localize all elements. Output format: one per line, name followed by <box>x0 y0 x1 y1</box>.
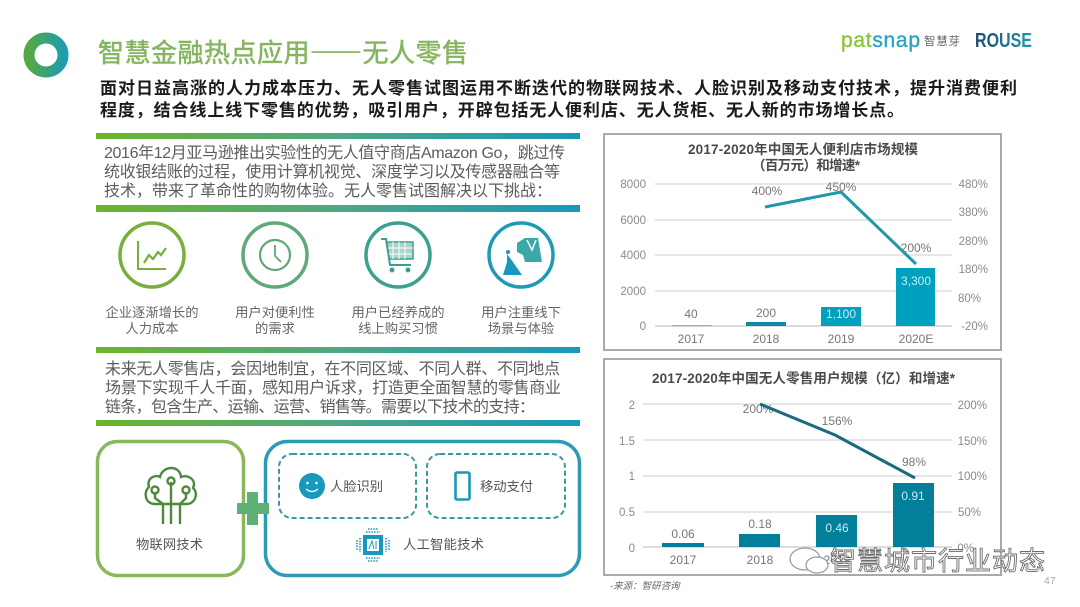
bar values: 0.18 <box>748 517 772 531</box>
logo: patsnap: 智慧芽 <box>924 34 960 48</box>
bar values <box>671 489 925 541</box>
growth labels: 400% <box>752 184 783 198</box>
panel: face recognition <box>279 454 416 518</box>
left axis: 6000 <box>620 215 646 227</box>
growth labels: 450% <box>826 180 857 194</box>
panel: mobile payment <box>427 454 565 518</box>
left axis <box>619 400 635 555</box>
left axis: 2000 <box>620 286 646 298</box>
label: AI: 人工智能技术 <box>403 537 484 552</box>
right axis: 380% <box>959 207 988 219</box>
growth line <box>765 192 916 264</box>
categories: 2017 <box>678 332 705 346</box>
right axis: 280% <box>959 236 988 248</box>
icon: AI chip <box>357 529 389 561</box>
grid lines and bars <box>655 184 952 326</box>
right axis: 80% <box>958 293 981 305</box>
label: challenge 1: 企业逐渐增长的 <box>105 304 199 320</box>
bar values: 0.91 <box>901 489 925 503</box>
panel: face recognition: 人脸识别 <box>330 479 383 494</box>
label: IoT: 物联网技术 <box>136 537 203 552</box>
left axis: 1 <box>629 471 635 483</box>
left axis: 0 <box>640 321 646 333</box>
chart title <box>688 141 918 173</box>
bar values: 0.06 <box>671 527 695 541</box>
growth labels: 200% <box>743 402 774 416</box>
chart title: 2017-2020年中国无人便利店市场规模 <box>688 141 918 157</box>
panel: future paragraph <box>96 347 580 426</box>
icon: title ring <box>29 38 63 72</box>
subtitle text block: 程度，结合线上线下零售的优势，吸引用户，开辟包括无人便利店、无人货柜、无人新的市场增长点。 <box>100 100 904 120</box>
growth labels: 156% <box>822 414 853 428</box>
logo: ROUSE: ROUSE <box>975 30 1032 52</box>
growth labels: 98% <box>902 455 926 469</box>
label: challenge 3 <box>351 304 445 336</box>
label: challenge 3: 用户已经养成的 <box>351 304 445 320</box>
categories: 2018 <box>753 332 780 346</box>
left axis: 8000 <box>620 179 646 191</box>
right axis: 0% <box>957 543 974 555</box>
panel: intro paragraph: 统收银结账的过程，使用计算机视觉、深度学习以及传感器融合等 <box>104 162 560 181</box>
categories: 2019 <box>824 553 851 567</box>
icon: rising labor cost chart <box>120 223 184 287</box>
label: challenge 2: 的需求 <box>255 321 295 336</box>
label: challenge 4: 用户注重线下 <box>481 304 561 320</box>
subtitle text block: 面对日益高涨的人力成本压力、无人零售试图运用不断迭代的物联网技术、人脸识别及移动支付技术，提升消费便利 <box>100 78 1017 98</box>
right axis <box>957 400 987 555</box>
left axis: 0.5 <box>619 507 635 519</box>
bar values: 40 <box>684 307 698 321</box>
page number: 47 <box>1044 575 1056 587</box>
logo: patsnap <box>841 29 960 52</box>
panel: chart 1 convenience store market <box>604 134 1001 350</box>
subtitle text block <box>100 78 1017 120</box>
icon: wechat bubbles <box>790 548 828 573</box>
panel: intro paragraph: 2016年12月亚马逊推出实验性的无人值守商店Amazon Go，跳过传 <box>104 144 565 162</box>
icon: clock <box>243 223 307 287</box>
left axis: 2 <box>629 400 635 412</box>
panel: intro paragraph <box>96 133 580 212</box>
growth line <box>760 404 915 478</box>
chart title: 2017-2020年中国无人零售用户规模（亿）和增速* <box>652 370 956 386</box>
right axis: 200% <box>958 400 987 412</box>
source note: -来源：智研咨询 <box>610 580 681 592</box>
growth labels <box>743 402 926 469</box>
label: challenge 1 <box>105 304 199 336</box>
label: challenge 1: 人力成本 <box>125 321 179 336</box>
categories: 2020E <box>899 332 933 346</box>
panel: AI technologies <box>266 442 580 576</box>
bar values: 1,100 <box>826 307 856 321</box>
panel: mobile payment: 移动支付 <box>480 479 533 494</box>
categories: 2018 <box>747 553 774 567</box>
watermark: 智慧城市行业动态 <box>830 546 1045 576</box>
bar values: 0.46 <box>825 521 849 535</box>
bar values <box>684 274 931 321</box>
right axis: 480% <box>959 179 988 191</box>
label: challenge 2: 用户对便利性 <box>235 304 315 320</box>
right axis: -20% <box>961 321 988 333</box>
panel: future paragraph: 场景下实现千人千面，感知用户诉求，打造更全面智慧的零售商业 <box>105 379 561 397</box>
icon: clothing <box>489 223 553 287</box>
label: challenge 4: 场景与体验 <box>488 321 554 336</box>
bar values: 200 <box>756 306 776 320</box>
icon: plus <box>237 492 269 525</box>
label: challenge 4 <box>481 304 561 336</box>
title: 智慧金融热点应用——无人零售 <box>98 33 468 70</box>
left axis: 4000 <box>620 250 646 262</box>
panel: future paragraph: 未来无人零售店，会因地制宜，在不同区域、不同人群、不同地点 <box>105 360 560 378</box>
panel: IoT technology <box>98 442 244 576</box>
right axis: 150% <box>958 436 987 448</box>
categories <box>670 553 851 567</box>
label: challenge 2 <box>235 304 315 336</box>
left axis <box>620 179 646 333</box>
left axis: 0 <box>629 543 635 555</box>
icon: shopping cart <box>366 223 430 287</box>
chart title: （百万元）和增速* <box>752 157 861 173</box>
right axis: 50% <box>958 507 981 519</box>
right axis: 100% <box>958 471 987 483</box>
panel: future paragraph: 链条，包含生产、运输、运营、销售等。需要以下技术的支持： <box>105 398 535 416</box>
categories <box>678 332 933 346</box>
bar values: 3,300 <box>901 274 931 288</box>
left axis: 1.5 <box>619 436 635 448</box>
label: challenge 3: 线上购买习惯 <box>358 320 438 336</box>
panel: intro paragraph: 技术，带来了革命性的购物体验。无人零售试图解决以下挑战： <box>104 182 552 200</box>
right axis: 180% <box>959 264 988 276</box>
growth labels <box>752 180 932 255</box>
categories: 2017 <box>670 553 697 567</box>
icon: circuit tree <box>146 468 196 524</box>
categories: 2019 <box>828 332 855 346</box>
growth labels: 200% <box>901 241 932 255</box>
grid lines and bars <box>643 404 952 547</box>
right axis <box>958 179 988 333</box>
logo: patsnap: patsnap <box>841 29 920 52</box>
panel: chart 2 unmanned retail users <box>604 359 1001 575</box>
